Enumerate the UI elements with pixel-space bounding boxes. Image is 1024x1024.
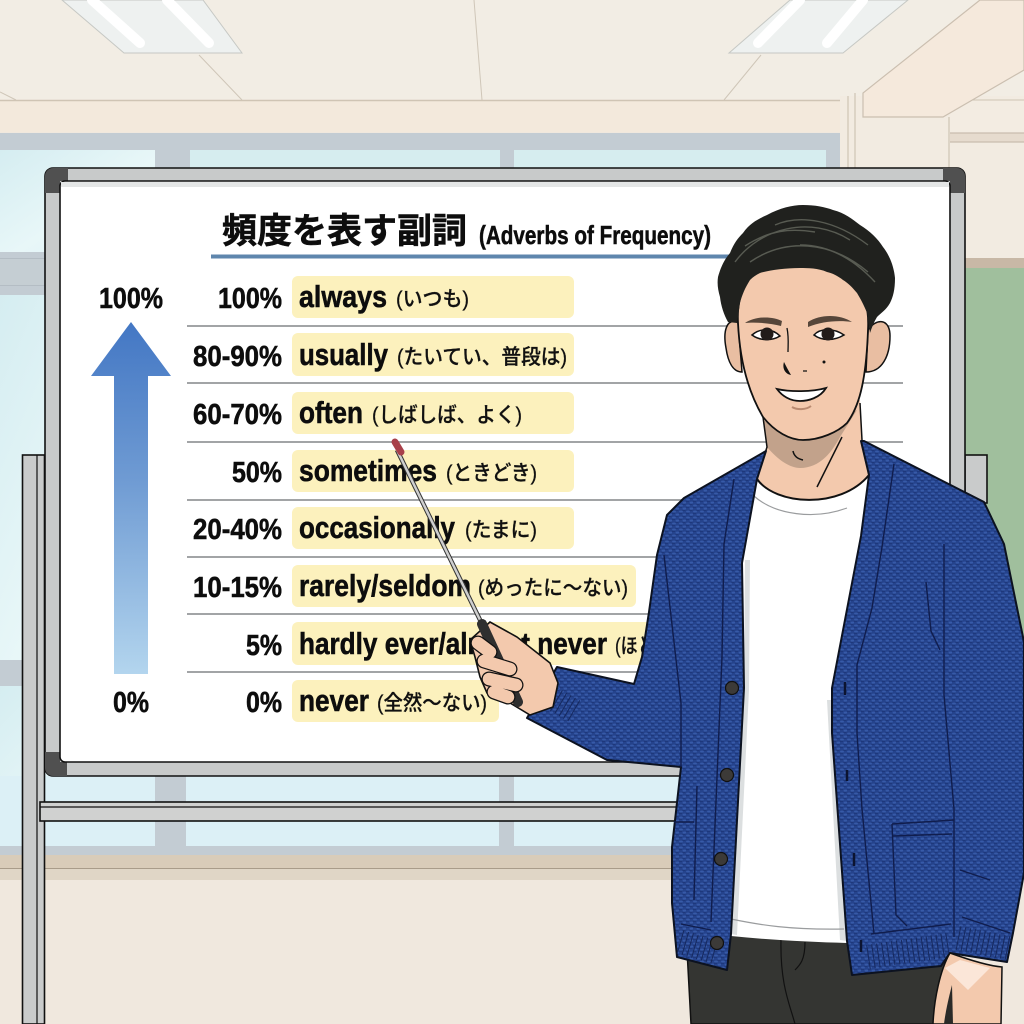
row: usually: 80-90% bbox=[193, 341, 282, 373]
neck bbox=[757, 400, 869, 500]
ceiling bbox=[0, 0, 1024, 132]
stand: left leg bbox=[22, 455, 44, 1024]
left hand palm bbox=[470, 622, 558, 715]
row: often bbox=[193, 392, 574, 434]
mole bbox=[822, 360, 826, 364]
row: never: 0% bbox=[246, 687, 282, 719]
right ear bbox=[866, 322, 890, 372]
row: never: never bbox=[299, 683, 369, 718]
right hand highlight bbox=[945, 960, 990, 990]
left ear bbox=[725, 321, 742, 372]
row: occasionally: occasionally bbox=[299, 510, 456, 545]
row: usually: (たいてい、普段は) bbox=[397, 346, 567, 369]
row: occasionally bbox=[193, 507, 574, 549]
hair highlights bbox=[735, 220, 875, 282]
stand: cross bar bbox=[40, 802, 685, 821]
face bbox=[738, 258, 868, 440]
nose bbox=[787, 328, 807, 371]
row: hardly ever/almost never: hardly ever/almost never bbox=[299, 626, 607, 661]
right hand bbox=[933, 953, 1002, 1024]
nostril bbox=[783, 362, 791, 375]
fingers over handle bbox=[478, 643, 516, 697]
row: occasionally: 20-40% bbox=[193, 514, 282, 546]
t-shirt collar bbox=[757, 475, 869, 500]
row: hardly ever/almost never: 5% bbox=[246, 630, 282, 662]
trousers bbox=[687, 930, 945, 1024]
title english: (Adverbs of Frequency) bbox=[479, 220, 711, 250]
title bbox=[222, 212, 711, 251]
ceiling beam bbox=[863, 0, 1024, 117]
neck outlines bbox=[757, 403, 869, 487]
row: usually: usually bbox=[299, 337, 389, 372]
arrow top label: 100% bbox=[99, 283, 163, 315]
row: always bbox=[218, 276, 574, 318]
right wall bbox=[840, 93, 1024, 260]
cardigan bbox=[527, 441, 1024, 975]
row: never: (全然〜ない) bbox=[377, 691, 487, 715]
t-shirt hem and collar seams bbox=[731, 496, 847, 929]
right hand finger gap bbox=[944, 985, 953, 1024]
corner: bottom left bbox=[45, 752, 67, 776]
board surface bbox=[60, 181, 950, 762]
row: sometimes: 50% bbox=[232, 457, 282, 489]
row: always: 100% bbox=[218, 283, 282, 315]
hair bbox=[718, 205, 895, 333]
row: rarely/seldom bbox=[193, 565, 636, 607]
title underline bbox=[211, 254, 731, 258]
lower lip bbox=[792, 406, 811, 409]
row: often: (しばしば、よく) bbox=[372, 404, 522, 427]
row: sometimes: (ときどき) bbox=[446, 462, 537, 485]
row: sometimes bbox=[232, 450, 574, 492]
row: always: (いつも) bbox=[396, 288, 469, 311]
corner: top right bbox=[943, 168, 965, 193]
row: never bbox=[246, 680, 499, 722]
ceiling light right bbox=[729, 0, 908, 53]
table row dividers bbox=[187, 326, 903, 672]
title japanese: 頻度を表す副詞 bbox=[222, 212, 467, 251]
ceiling light left bbox=[62, 0, 242, 53]
trouser fly line bbox=[781, 940, 805, 1024]
teacher bbox=[395, 205, 1024, 1024]
board frame bbox=[45, 168, 965, 776]
cardigan buttonholes bbox=[845, 682, 861, 952]
frequency arrow bbox=[91, 322, 171, 674]
board top inner shadow bbox=[61, 182, 949, 187]
eyes bbox=[752, 328, 844, 340]
row: rarely/seldom: 10-15% bbox=[193, 572, 282, 604]
stand: right leg bbox=[965, 455, 987, 503]
t-shirt side shading bbox=[731, 560, 847, 941]
row: hardly ever/almost never bbox=[246, 622, 745, 665]
row: sometimes: sometimes bbox=[299, 453, 437, 488]
row: always: always bbox=[299, 279, 387, 314]
cardigan seams and pockets bbox=[664, 464, 1010, 937]
corner: top left bbox=[45, 168, 68, 193]
cardigan buttons bbox=[710, 682, 738, 950]
row: hardly ever/almost never: (ほとんど〜ない) bbox=[615, 635, 745, 658]
row: occasionally: (たまに) bbox=[465, 519, 537, 542]
arrow bottom label: 0% bbox=[113, 687, 149, 719]
row: rarely/seldom: rarely/seldom bbox=[299, 568, 471, 603]
cardigan ribbed hems and cuffs bbox=[543, 693, 1008, 957]
row: rarely/seldom: (めったに〜ない) bbox=[478, 577, 628, 600]
whiteboard bbox=[45, 168, 965, 776]
neck shadow bbox=[763, 410, 857, 468]
eyebrows bbox=[745, 316, 852, 327]
pointer stick bbox=[397, 450, 482, 624]
pointer tip bbox=[395, 442, 401, 452]
row: usually bbox=[193, 333, 574, 376]
t-shirt bbox=[731, 475, 872, 943]
green chalkboard on the wall bbox=[950, 258, 1024, 880]
windows bbox=[0, 133, 850, 880]
mouth bbox=[777, 388, 826, 401]
pointer handle bbox=[482, 624, 518, 702]
row: often: 60-70% bbox=[193, 399, 282, 431]
row: often: often bbox=[299, 395, 363, 430]
